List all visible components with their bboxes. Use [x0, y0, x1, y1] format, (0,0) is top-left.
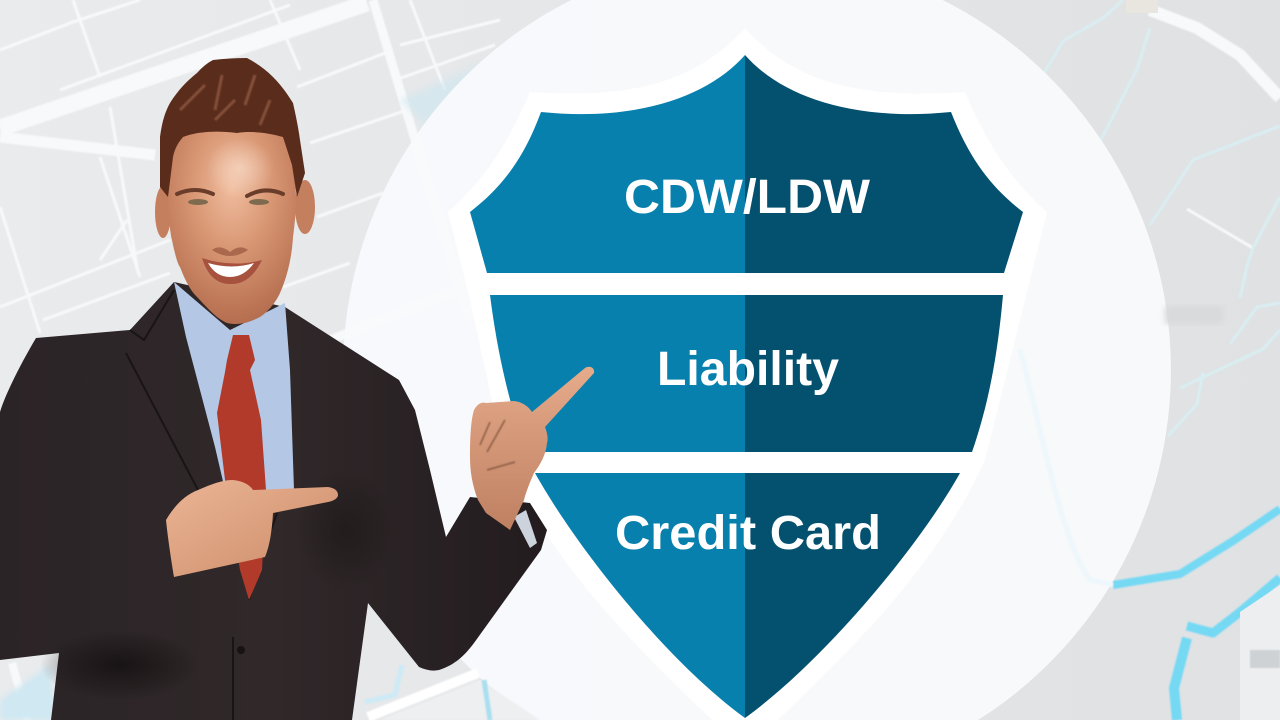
eyes	[188, 199, 269, 205]
man pointing	[0, 58, 594, 720]
smile	[202, 258, 262, 284]
eyebrows	[177, 190, 283, 196]
shield	[448, 28, 1047, 720]
hand: pointing right	[166, 480, 338, 577]
hand knuckle lines	[480, 420, 515, 470]
shield band: Credit Card: Credit Card	[615, 507, 881, 560]
shield band: Credit Card	[535, 473, 960, 718]
forehead highlight	[206, 138, 274, 198]
shield white outline	[448, 28, 1047, 720]
hair highlights	[180, 75, 270, 125]
head	[168, 122, 296, 324]
shirt cuff	[514, 510, 537, 548]
tie	[217, 335, 266, 600]
nose shadow	[212, 247, 248, 256]
shield band: Liability: Liability	[657, 343, 839, 396]
shield band: Liability	[490, 295, 1003, 452]
white circle backdrop	[343, 0, 1171, 720]
hand: pointing up	[470, 367, 594, 530]
shield band: CDW/LDW: CDW/LDW	[624, 171, 871, 224]
jacket shadows	[40, 470, 395, 700]
jacket lapel lines	[126, 290, 277, 720]
shield band: CDW/LDW	[470, 55, 1023, 273]
hair	[160, 58, 305, 197]
shirt	[174, 282, 294, 490]
ears	[155, 180, 315, 238]
suit button	[237, 646, 245, 654]
ghost map label	[1165, 306, 1223, 324]
faint map showing through circle	[365, 350, 1113, 720]
suit jacket	[0, 282, 547, 720]
